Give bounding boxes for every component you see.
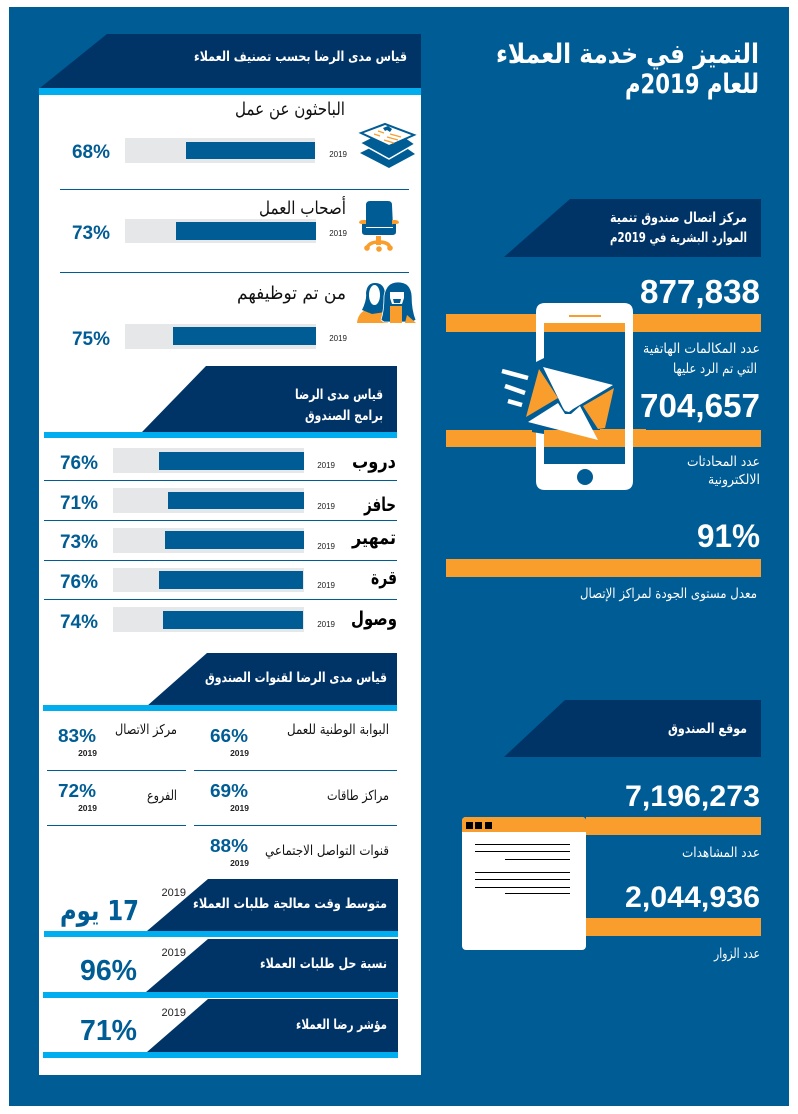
icon: phone with envelope bbox=[502, 303, 633, 490]
row: job seekers: 2019 bbox=[329, 150, 348, 159]
channel: Taqat centres bbox=[210, 780, 389, 813]
divider bbox=[60, 272, 409, 273]
row: employers bbox=[72, 196, 348, 244]
band: request resolution rate: 2019 bbox=[162, 947, 186, 959]
title bbox=[496, 39, 759, 100]
row: Duroob: 2019 bbox=[317, 461, 336, 470]
channel: Taqat centres: 2019 bbox=[230, 803, 249, 813]
section: fund channels bbox=[43, 653, 397, 868]
row: job seekers: الباحثون عن عمل bbox=[235, 99, 345, 120]
band: average request time: 2019 bbox=[162, 887, 186, 899]
panel: satisfaction bbox=[39, 34, 421, 1075]
channel: national labour portal: 2019 bbox=[230, 748, 249, 758]
stat: answered calls: 877,838 bbox=[640, 273, 760, 310]
stat: electronic conversations: 704,657 bbox=[640, 387, 760, 424]
row: employers: أصحاب العمل bbox=[259, 196, 346, 219]
band: customer satisfaction index: 71% bbox=[80, 1015, 137, 1047]
channel: social media: 88% bbox=[210, 835, 248, 856]
row: employed: 75% bbox=[72, 329, 110, 350]
stat: visitors bbox=[586, 881, 761, 962]
heading: programmes satisfaction bbox=[44, 366, 397, 438]
band: customer satisfaction index bbox=[43, 999, 398, 1058]
row: Duroob: 76% bbox=[60, 453, 98, 474]
stat: contact centre quality: معدل مستوى الجودة لمراكز الإتصال bbox=[580, 586, 757, 602]
stat: visitors: 2,044,936 bbox=[625, 881, 760, 914]
band: customer satisfaction index: 2019 bbox=[162, 1007, 186, 1019]
row: Qurra: 76% bbox=[60, 572, 98, 593]
row: Wusool: وصول bbox=[351, 608, 397, 630]
icon: browser window bbox=[462, 817, 586, 950]
channel: national labour portal bbox=[210, 722, 389, 758]
row: employers: 73% bbox=[72, 223, 110, 244]
heading: contact centre: مركز اتصال صندوق تنمية bbox=[610, 210, 747, 226]
title: للعام 2019م bbox=[625, 69, 759, 100]
band: average request time: متوسط وقت معالجة طلبات العملاء bbox=[193, 896, 387, 912]
heading: channels satisfaction bbox=[43, 653, 397, 711]
icon: office chair bbox=[359, 201, 399, 252]
title: التميز في خدمة العملاء bbox=[496, 39, 759, 70]
channel: social media: 2019 bbox=[230, 858, 249, 868]
divider bbox=[60, 189, 409, 190]
row: Duroob: دروب bbox=[352, 451, 396, 473]
row: Hafiz: 71% bbox=[60, 493, 98, 514]
channel: social media: قنوات التواصل الاجتماعي bbox=[265, 843, 389, 859]
heading: programmes satisfaction: قياس مدى الرضا bbox=[295, 387, 383, 403]
channel: branches: 72% bbox=[58, 780, 96, 801]
stat: page views bbox=[586, 780, 761, 861]
row: Hafiz bbox=[60, 488, 396, 516]
icon: man and woman bbox=[357, 282, 416, 323]
row: job seekers: 68% bbox=[72, 142, 110, 163]
heading: fund website: موقع الصندوق bbox=[668, 721, 747, 737]
stat: contact centre quality bbox=[446, 518, 761, 602]
stat: electronic conversations: الالكترونية bbox=[708, 472, 760, 488]
row: Hafiz: حافز bbox=[363, 494, 396, 516]
row: Wusool bbox=[60, 607, 397, 633]
heading: channels satisfaction: قياس مدى الرضا لقنوات الصندوق bbox=[205, 670, 387, 686]
row: Tamheer bbox=[60, 527, 396, 553]
row: Qurra: 2019 bbox=[317, 581, 336, 590]
stat: answered calls: عدد المكالمات الهاتفية bbox=[643, 341, 760, 357]
row: Duroob bbox=[60, 448, 396, 474]
row: Wusool: 74% bbox=[60, 612, 98, 633]
heading: programmes satisfaction: برامج الصندوق bbox=[305, 408, 383, 424]
stat: answered calls bbox=[446, 273, 761, 377]
channel: national labour portal: 66% bbox=[210, 725, 248, 746]
row: employed: 2019 bbox=[329, 334, 348, 343]
channel: branches: 2019 bbox=[78, 803, 97, 813]
row: employed: من تم توظيفهم bbox=[237, 283, 346, 304]
channel: branches: الفروع bbox=[147, 788, 177, 804]
row: Wusool: 2019 bbox=[317, 620, 336, 629]
heading: customer classification satisfaction: قياس مدى الرضا بحسب تصنيف العملاء bbox=[194, 49, 407, 65]
channel: Taqat centres: مراكز طاقات bbox=[327, 788, 389, 804]
band: request resolution rate: نسبة حل طلبات العملاء bbox=[260, 956, 387, 972]
channel: contact centre: 83% bbox=[58, 725, 96, 746]
band: request resolution rate: 96% bbox=[80, 955, 137, 987]
row: Qurra: قرة bbox=[371, 567, 397, 589]
channel: contact centre: مركز الاتصال bbox=[115, 722, 177, 738]
band: average request time bbox=[44, 879, 398, 937]
heading: contact centre: الموارد البشرية في 2019م bbox=[610, 230, 747, 246]
stat: answered calls: التي تم الرد عليها bbox=[673, 361, 757, 377]
row: Tamheer: 73% bbox=[60, 532, 98, 553]
icon: stack of papers bbox=[360, 124, 415, 168]
stat: page views: 7,196,273 bbox=[625, 780, 760, 813]
channel: contact centre: 2019 bbox=[78, 748, 97, 758]
row: job seekers bbox=[72, 99, 348, 163]
row: employers: 2019 bbox=[329, 229, 348, 238]
channel: social media bbox=[210, 835, 389, 868]
heading: customer classification satisfaction bbox=[39, 34, 421, 95]
stat: visitors: عدد الزوار bbox=[713, 946, 760, 962]
row: Tamheer: تمهير bbox=[351, 527, 396, 549]
row: Hafiz: 2019 bbox=[317, 502, 336, 511]
channel: national labour portal: البوابة الوطنية للعمل bbox=[287, 722, 389, 738]
stat: page views: عدد المشاهدات bbox=[682, 845, 760, 861]
section: fund programmes bbox=[44, 366, 397, 633]
heading: fund website bbox=[504, 700, 761, 757]
channel: Taqat centres: 69% bbox=[210, 780, 248, 801]
row: Qurra bbox=[60, 567, 397, 593]
row: Tamheer: 2019 bbox=[317, 542, 336, 551]
channel: contact centre bbox=[58, 722, 177, 758]
stat: contact centre quality: 91% bbox=[697, 518, 760, 554]
stat: electronic conversations: عدد المحادثات bbox=[687, 454, 760, 470]
band: average request time: 17 يوم bbox=[60, 894, 139, 927]
band: request resolution rate bbox=[43, 939, 398, 998]
heading: contact centre bbox=[504, 199, 761, 257]
channel: branches bbox=[58, 780, 177, 813]
band: customer satisfaction index: مؤشر رضا العملاء bbox=[296, 1017, 387, 1033]
stat: electronic conversations bbox=[446, 387, 761, 488]
row: employed bbox=[72, 283, 348, 350]
